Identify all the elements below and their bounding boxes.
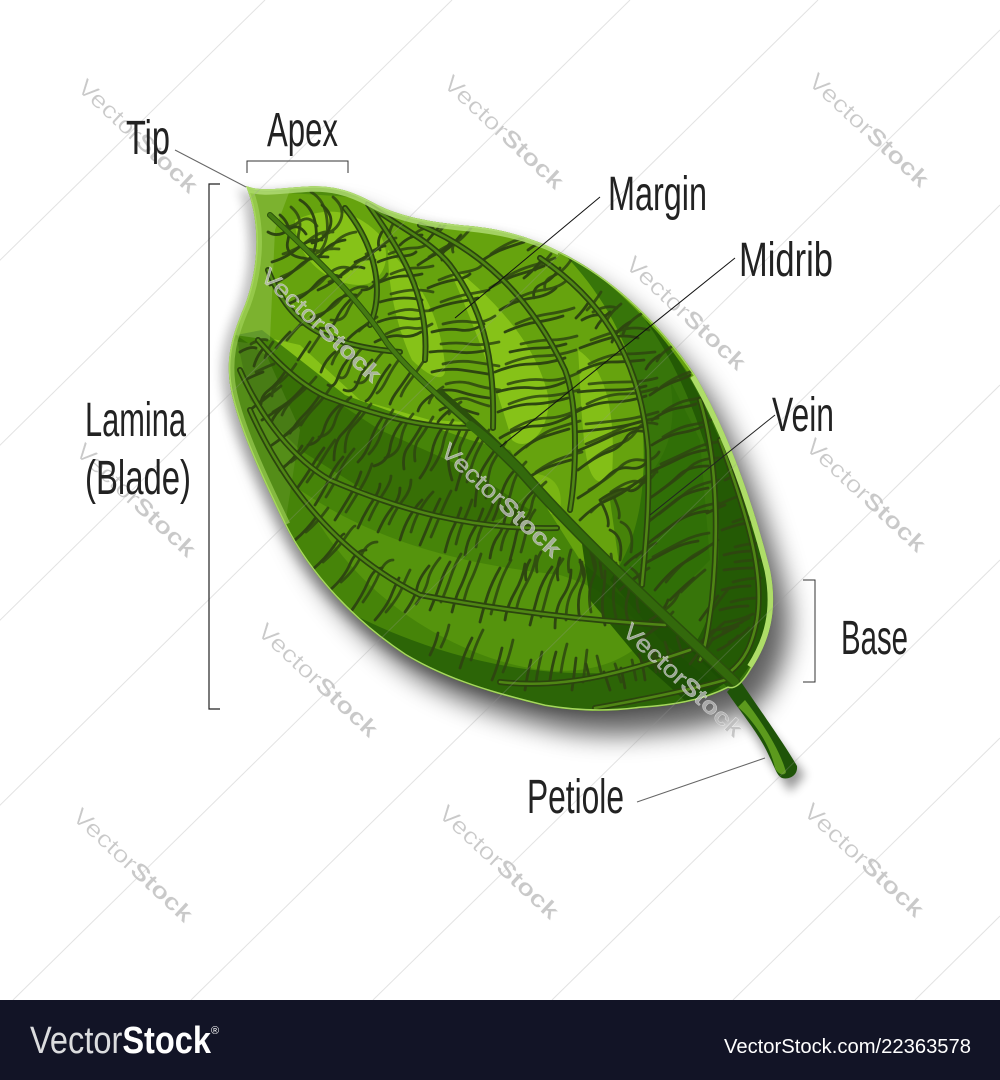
- midrib: [270, 215, 735, 682]
- annotation: Apex: Apex: [267, 104, 338, 157]
- annotation: Tip: [126, 112, 246, 187]
- annotation: Base: Base: [841, 612, 908, 665]
- VectorStock watermarks: VectorStock: [68, 803, 199, 928]
- leaf illustration: [225, 180, 797, 778]
- annotation: Petiole: Petiole: [527, 771, 624, 824]
- VectorStock watermarks: VectorStock: [253, 618, 384, 743]
- annotation: Margin: [455, 168, 707, 318]
- annotation: Margin: Margin: [608, 168, 707, 221]
- annotation: Vein: Vein: [772, 389, 834, 442]
- leaf margin rim: [229, 186, 773, 711]
- VectorStock watermarks: VectorStock: [434, 800, 565, 925]
- registered mark: ®: [211, 1025, 219, 1037]
- VectorStock watermarks: VectorStock: [804, 68, 935, 193]
- VectorStock watermarks: VectorStock: [436, 438, 567, 563]
- footer url: VectorStock.com/22363578: [724, 1036, 971, 1058]
- VectorStock watermarks: VectorStock: [256, 263, 387, 388]
- VectorStock watermarks: VectorStock: [439, 70, 570, 195]
- annotation: Lamina (Blade): (Blade): [85, 452, 191, 505]
- VectorStock watermarks: VectorStock: [621, 251, 752, 376]
- bottom dark edge: [357, 617, 728, 711]
- annotation: Lamina (Blade): [85, 184, 220, 709]
- VectorStock watermarks: VectorStock: [801, 433, 932, 558]
- VectorStock watermarks: [68, 68, 935, 928]
- petiole: [727, 679, 797, 778]
- annotation: Apex: [247, 104, 348, 173]
- lateral veins: [240, 204, 759, 708]
- annotation: Midrib: [500, 234, 833, 447]
- bright lobes: [255, 212, 613, 515]
- footer bar: [0, 1000, 1000, 1080]
- footer logo: VectorStock: [30, 1020, 212, 1062]
- blade upper light area: [240, 190, 716, 566]
- VectorStock watermarks: VectorStock: [618, 618, 749, 743]
- right-hand shaded band: [560, 250, 780, 700]
- annotation: Lamina (Blade): Lamina: [85, 394, 186, 447]
- annotation: Petiole: [527, 758, 765, 824]
- VectorStock watermarks: VectorStock: [799, 798, 930, 923]
- VectorStock watermarks: VectorStock: [71, 438, 202, 563]
- annotation: Tip: Tip: [126, 112, 170, 165]
- darker band under the midrib: [229, 330, 640, 711]
- leaf blade: [225, 180, 780, 730]
- annotation: Midrib: Midrib: [739, 234, 833, 287]
- veinlets: [240, 192, 765, 690]
- VectorStock watermarks: VectorStock: [73, 74, 204, 199]
- drop shadow: [221, 188, 805, 792]
- pale veil at the tip and left edge: [236, 193, 288, 340]
- annotation: Base: [803, 580, 908, 682]
- annotation: Vein: [650, 389, 834, 515]
